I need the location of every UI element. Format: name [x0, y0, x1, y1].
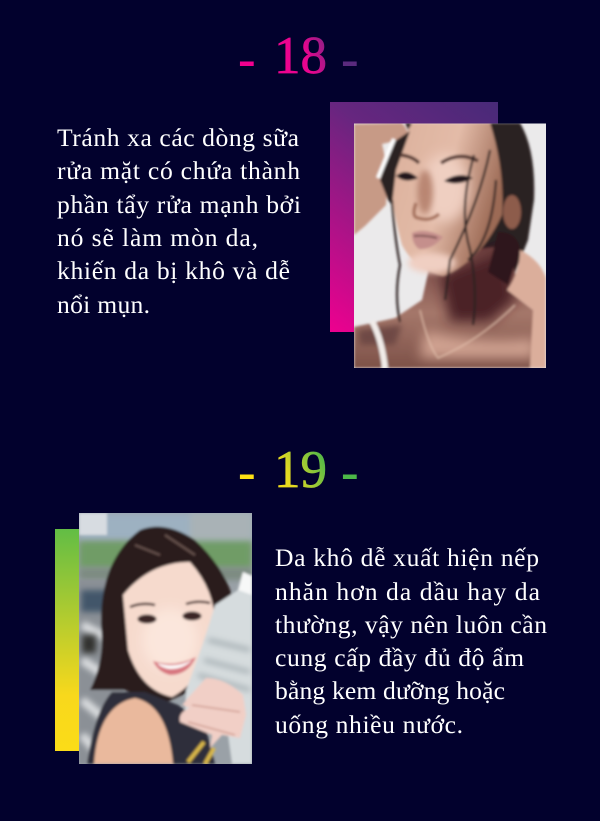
- eyes: [138, 614, 156, 624]
- text block: tip 18: rửa mặt có chứa thành: [57, 156, 300, 185]
- face: [123, 562, 215, 697]
- photo: woman with wet hair: [354, 123, 546, 368]
- gradient frame: green to yellow: [55, 529, 79, 751]
- shoulder: [94, 698, 173, 764]
- heading: number 19: [238, 441, 359, 501]
- mouth: [153, 657, 196, 675]
- heading: number 18: -: [341, 30, 359, 88]
- text block: tip 19: bằng kem dưỡng hoặc: [275, 676, 505, 705]
- text block: tip 18: Tránh xa các dòng sữa: [57, 123, 300, 152]
- hand on forehead: [354, 123, 408, 235]
- street clutter: [79, 580, 124, 764]
- neck and chest: [354, 245, 546, 368]
- dark top: [87, 692, 215, 764]
- eyebrows: [400, 155, 478, 163]
- text block: tip 19: nhăn hơn da dầu hay da: [275, 577, 541, 606]
- text block: tip 19: thường, vậy nên luôn cần: [275, 610, 547, 639]
- sky and buildings: [79, 513, 192, 543]
- text block: tip 19: [275, 543, 547, 739]
- text block: tip 19: uống nhiều nước.: [275, 710, 463, 739]
- text block: tip 18: nổi mụn.: [57, 290, 150, 319]
- shirt print: [188, 742, 214, 764]
- heading: number 18: 18: [274, 27, 327, 85]
- water bottle: [185, 572, 252, 764]
- text block: tip 19: Da khô dễ xuất hiện nếp: [275, 543, 539, 572]
- heading: number 18: [238, 27, 359, 88]
- hair beside hand: [380, 131, 410, 205]
- eyebrows: [130, 602, 210, 607]
- ear: [503, 195, 521, 229]
- heading: number 19: 19: [274, 441, 327, 499]
- photo: smiling woman with water bottle: [79, 513, 252, 764]
- nose: [414, 203, 439, 219]
- text block: tip 18: nó sẽ làm mòn da,: [57, 223, 258, 252]
- hand on neck: [507, 250, 546, 368]
- gradient frame: purple to magenta: [330, 102, 498, 332]
- hair: [90, 527, 232, 705]
- loose strands: [392, 150, 496, 325]
- text block: tip 18: [57, 123, 301, 319]
- lips: [412, 231, 443, 249]
- text block: tip 19: cung cấp đầy đủ độ ẩm: [275, 643, 524, 672]
- green bridge: [79, 541, 252, 568]
- strap and necklace: [372, 321, 385, 368]
- eyes: [396, 172, 418, 181]
- heading: number 18: -: [238, 30, 256, 88]
- text block: tip 18: phần tẩy rửa mạnh bởi: [57, 190, 301, 219]
- hair back: [405, 123, 534, 290]
- face: [391, 123, 502, 276]
- text block: tip 18: khiến da bị khô và dễ: [57, 256, 290, 285]
- heading: number 19: -: [238, 443, 256, 501]
- hand: [180, 678, 246, 748]
- heading: number 19: -: [341, 443, 359, 501]
